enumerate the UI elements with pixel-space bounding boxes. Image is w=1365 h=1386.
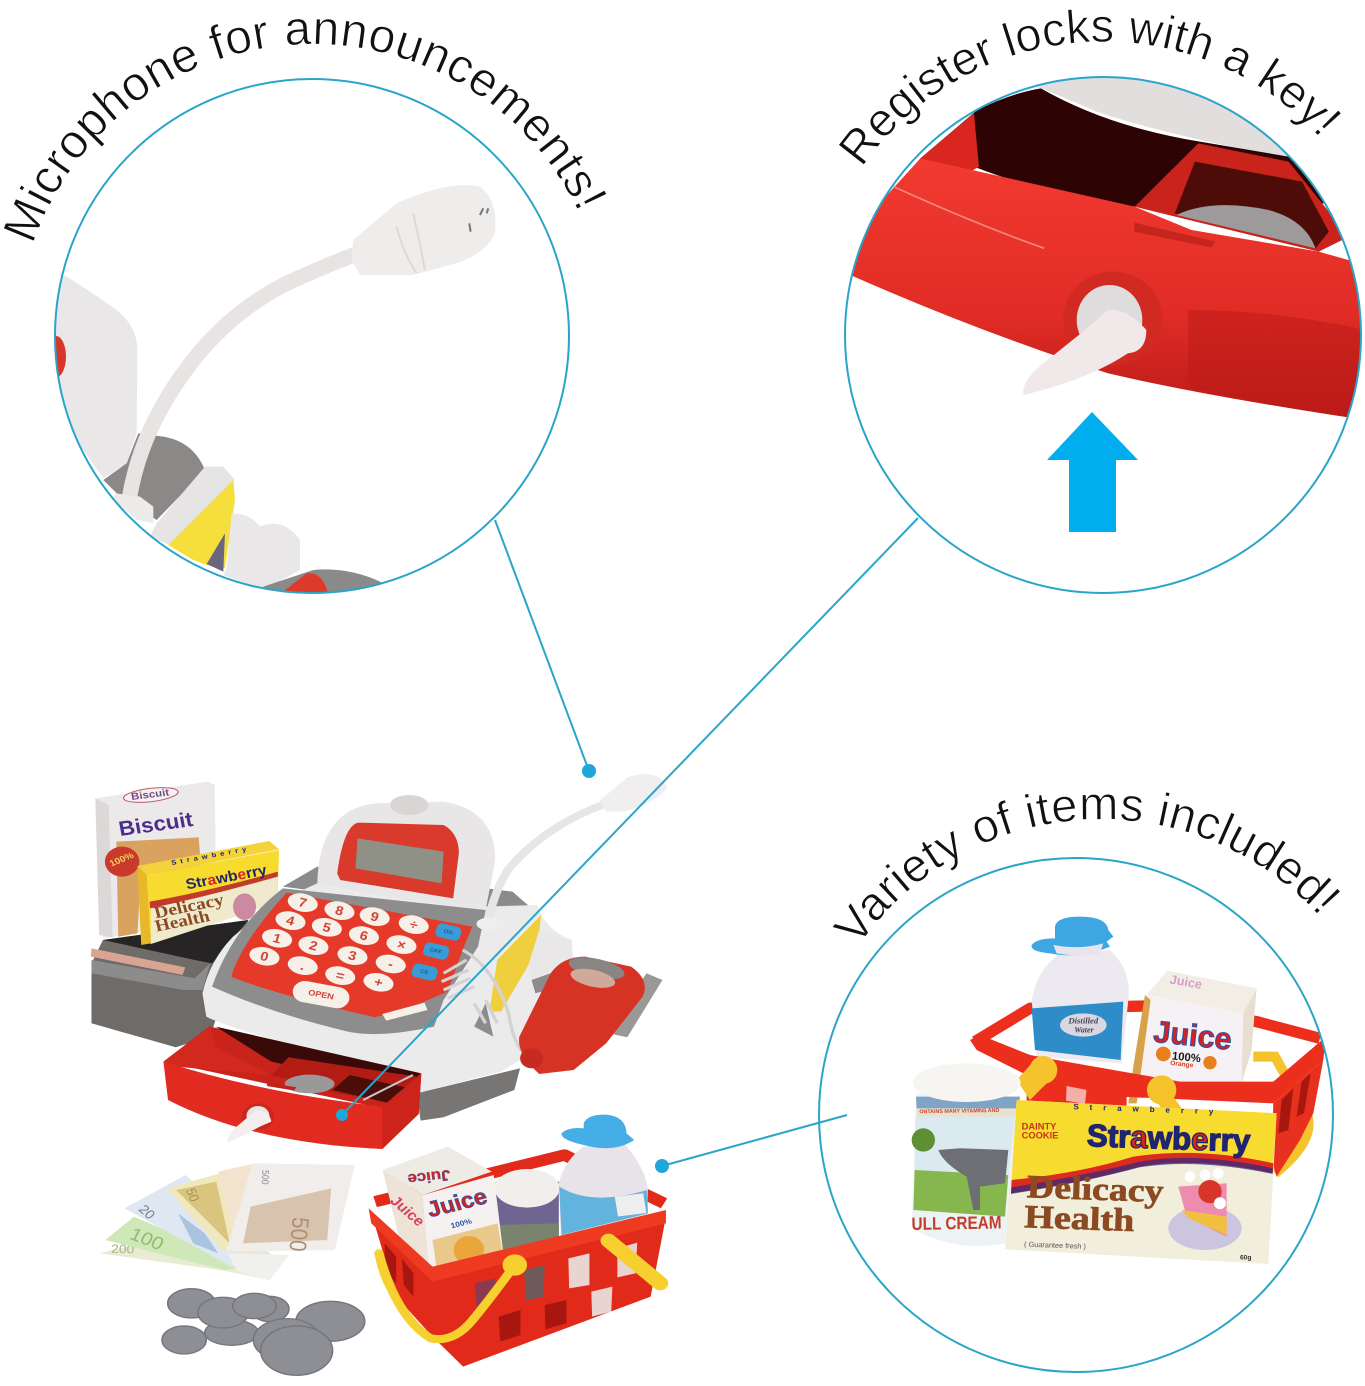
keypad buttons: ÷ bbox=[408, 917, 420, 933]
play coins bbox=[162, 1289, 365, 1375]
drawer front bbox=[847, 158, 1365, 420]
keypad buttons: 5 bbox=[321, 920, 333, 935]
coiled cord bbox=[442, 950, 535, 1062]
scanner bottom bbox=[263, 569, 382, 592]
blue function keys: CE bbox=[419, 969, 429, 976]
grey deck bbox=[103, 433, 205, 520]
basket side windows bbox=[1278, 1073, 1311, 1133]
heading: microphone: Microphone for announcements! bbox=[4, 19, 606, 241]
strawberry cookie box: 60g bbox=[1240, 1254, 1251, 1261]
basket side wall bbox=[1272, 1060, 1323, 1177]
keypad buttons: 0 bbox=[258, 949, 271, 964]
milk can bbox=[911, 1063, 1021, 1246]
keypad buttons: 8 bbox=[333, 903, 346, 919]
shopping basket with groceries bbox=[369, 1115, 666, 1367]
keypad buttons: 9 bbox=[369, 909, 381, 925]
blue function keys: OFF bbox=[429, 948, 443, 956]
water bottle: Distilled bbox=[1067, 1015, 1099, 1025]
basket rim back bbox=[975, 1006, 1320, 1042]
strawberry cookie box: Health bbox=[1024, 1199, 1135, 1239]
strawberry box small: Health bbox=[153, 906, 212, 935]
mic stem bbox=[129, 253, 358, 498]
white register underside bbox=[1038, 78, 1288, 156]
keypad buttons: = bbox=[334, 968, 346, 983]
juice box bbox=[1128, 971, 1257, 1103]
panel: included items close-up bbox=[819, 858, 1333, 1372]
banknote 100 bbox=[105, 1217, 251, 1270]
banknote 500: 500 bbox=[260, 1170, 271, 1185]
basket back rim bbox=[375, 1155, 664, 1203]
shaded corner bbox=[1188, 310, 1365, 420]
front yellow handle bbox=[379, 1253, 516, 1339]
banknote 100: 100 bbox=[126, 1224, 167, 1255]
connector line: key lock callout bbox=[336, 518, 918, 1121]
red scanner bbox=[519, 953, 645, 1074]
play money bbox=[100, 1163, 355, 1280]
cash drawer bbox=[163, 1026, 421, 1149]
receipt cradle and register body bbox=[202, 883, 574, 1093]
back grey deck bbox=[283, 867, 530, 917]
strawberry cookie box: Strawberry bbox=[1086, 1118, 1251, 1159]
basket rim bbox=[369, 1208, 666, 1282]
heading: items: Variety of items included! bbox=[832, 792, 1340, 936]
banknote 500 bbox=[226, 1163, 355, 1253]
keypad buttons: + bbox=[372, 975, 385, 990]
drawer lock and key bbox=[242, 1103, 274, 1130]
biscuit box bbox=[95, 782, 216, 938]
grey plate bbox=[212, 888, 486, 1034]
handle knobs bbox=[1018, 1056, 1182, 1108]
juice box: Juice bbox=[424, 1185, 490, 1223]
banknote 200 bbox=[100, 1237, 281, 1280]
lock ring bbox=[1064, 272, 1162, 334]
juice box: Juice bbox=[406, 1166, 451, 1187]
banknote 20 bbox=[124, 1175, 274, 1267]
lower note sliver bbox=[228, 1253, 289, 1280]
keypad buttons: 3 bbox=[346, 948, 359, 964]
lock plate bbox=[1076, 285, 1142, 334]
biscuit box: Biscuit bbox=[117, 807, 195, 841]
strawberry box small bbox=[137, 841, 279, 945]
banknote 50 bbox=[167, 1173, 258, 1253]
basket front rim bbox=[970, 1035, 1326, 1103]
basket windows bbox=[385, 1243, 637, 1342]
banknote 200: 200 bbox=[111, 1242, 134, 1256]
blue function keys: ON bbox=[443, 929, 453, 936]
juice box: 100% bbox=[1171, 1050, 1201, 1065]
drawer interior bbox=[920, 88, 1325, 207]
connector line: microphone callout bbox=[495, 520, 596, 778]
yellow card bbox=[489, 915, 541, 1012]
strawberry box small: Strawberry bbox=[171, 846, 247, 867]
red display edge bbox=[56, 336, 66, 376]
lip highlight bbox=[894, 187, 1044, 248]
display housing bbox=[50, 268, 137, 478]
grey base under register bbox=[417, 1068, 520, 1121]
strawberry cookie box: Delicacy bbox=[1026, 1169, 1165, 1210]
keypad buttons: 7 bbox=[297, 895, 309, 910]
key bbox=[1023, 310, 1146, 395]
keypad buttons: 4 bbox=[284, 913, 297, 929]
yellow card bbox=[168, 480, 235, 568]
milk can: ULL CREAM bbox=[911, 1212, 1002, 1234]
juice box: Orange bbox=[1170, 1060, 1194, 1069]
panel: key lock close-up bbox=[845, 70, 1365, 593]
strawberry cookie box: COOKIE bbox=[1022, 1131, 1058, 1141]
cradle white bbox=[528, 930, 574, 993]
water bottle bbox=[1032, 917, 1129, 1063]
pink window bbox=[1066, 1085, 1087, 1104]
biscuit box: 100% bbox=[108, 850, 136, 868]
water bottle bbox=[559, 1115, 648, 1237]
banknote 500: 500 bbox=[284, 1216, 314, 1253]
keypad buttons: 6 bbox=[358, 928, 370, 944]
connector line: items callout bbox=[655, 1115, 847, 1173]
banknote 10 bbox=[218, 1163, 258, 1253]
basket body bbox=[372, 1217, 666, 1367]
display head bbox=[317, 795, 495, 910]
strawberry cookie box: DAINTY bbox=[1022, 1121, 1057, 1131]
keypad buttons: 1 bbox=[271, 931, 283, 946]
blue function keys bbox=[410, 922, 463, 982]
keypad buttons: . bbox=[299, 959, 307, 973]
milk can: ONTAINS MANY VITAMINS AND bbox=[919, 1108, 1000, 1115]
water bottle: Water bbox=[1074, 1026, 1095, 1035]
juice box: Juice bbox=[1169, 972, 1203, 992]
back red wall bbox=[918, 114, 979, 170]
juice box: 100% bbox=[450, 1217, 473, 1230]
juice box bbox=[383, 1147, 503, 1267]
slot bbox=[1134, 223, 1216, 247]
right compartment bbox=[1135, 143, 1349, 252]
red keypad bbox=[231, 893, 472, 1017]
coin bbox=[1176, 205, 1315, 248]
strawberry cookie box: ( Guarantee fresh ) bbox=[1024, 1240, 1086, 1251]
back handle bbox=[379, 1257, 396, 1297]
toy cash register bbox=[91, 774, 667, 1149]
scanner tray bbox=[608, 973, 662, 1037]
digital scale base bbox=[91, 920, 248, 1047]
yellow back handle bbox=[1253, 1057, 1309, 1173]
mic head bbox=[352, 185, 495, 275]
icon: blue up arrow bbox=[1047, 412, 1138, 532]
panel: microphone close-up bbox=[46, 79, 569, 598]
juice box: Juice bbox=[386, 1193, 428, 1230]
can in basket bbox=[495, 1169, 560, 1263]
banknote 50: 50 bbox=[183, 1186, 203, 1203]
juice box: Juice bbox=[1152, 1015, 1233, 1057]
microphone bbox=[476, 774, 667, 931]
biscuit box: Biscuit bbox=[130, 787, 170, 803]
keypad buttons bbox=[247, 891, 431, 1021]
right yellow handle bbox=[609, 1241, 660, 1283]
keypad buttons: OPEN bbox=[307, 988, 335, 1001]
white cradle humps bbox=[223, 513, 300, 590]
banknote 20: 20 bbox=[136, 1202, 159, 1222]
cake illustration bbox=[1168, 1207, 1242, 1250]
strawberry box small: Delicacy bbox=[152, 890, 226, 922]
basket lower panel bbox=[1026, 1082, 1127, 1106]
heading: key lock: Register locks with a key! bbox=[839, 10, 1341, 164]
keypad buttons: × bbox=[395, 937, 408, 952]
strawberry box small: Strawberry bbox=[184, 863, 269, 893]
white cradle bbox=[150, 467, 235, 545]
grommet bbox=[113, 493, 153, 523]
strawberry cookie box bbox=[1005, 1100, 1277, 1264]
cradle shadow grooves bbox=[474, 973, 551, 1037]
strawberry cookie box: Strawberry bbox=[1073, 1102, 1214, 1116]
keypad buttons: 2 bbox=[307, 938, 320, 954]
keypad buttons: - bbox=[386, 957, 395, 971]
